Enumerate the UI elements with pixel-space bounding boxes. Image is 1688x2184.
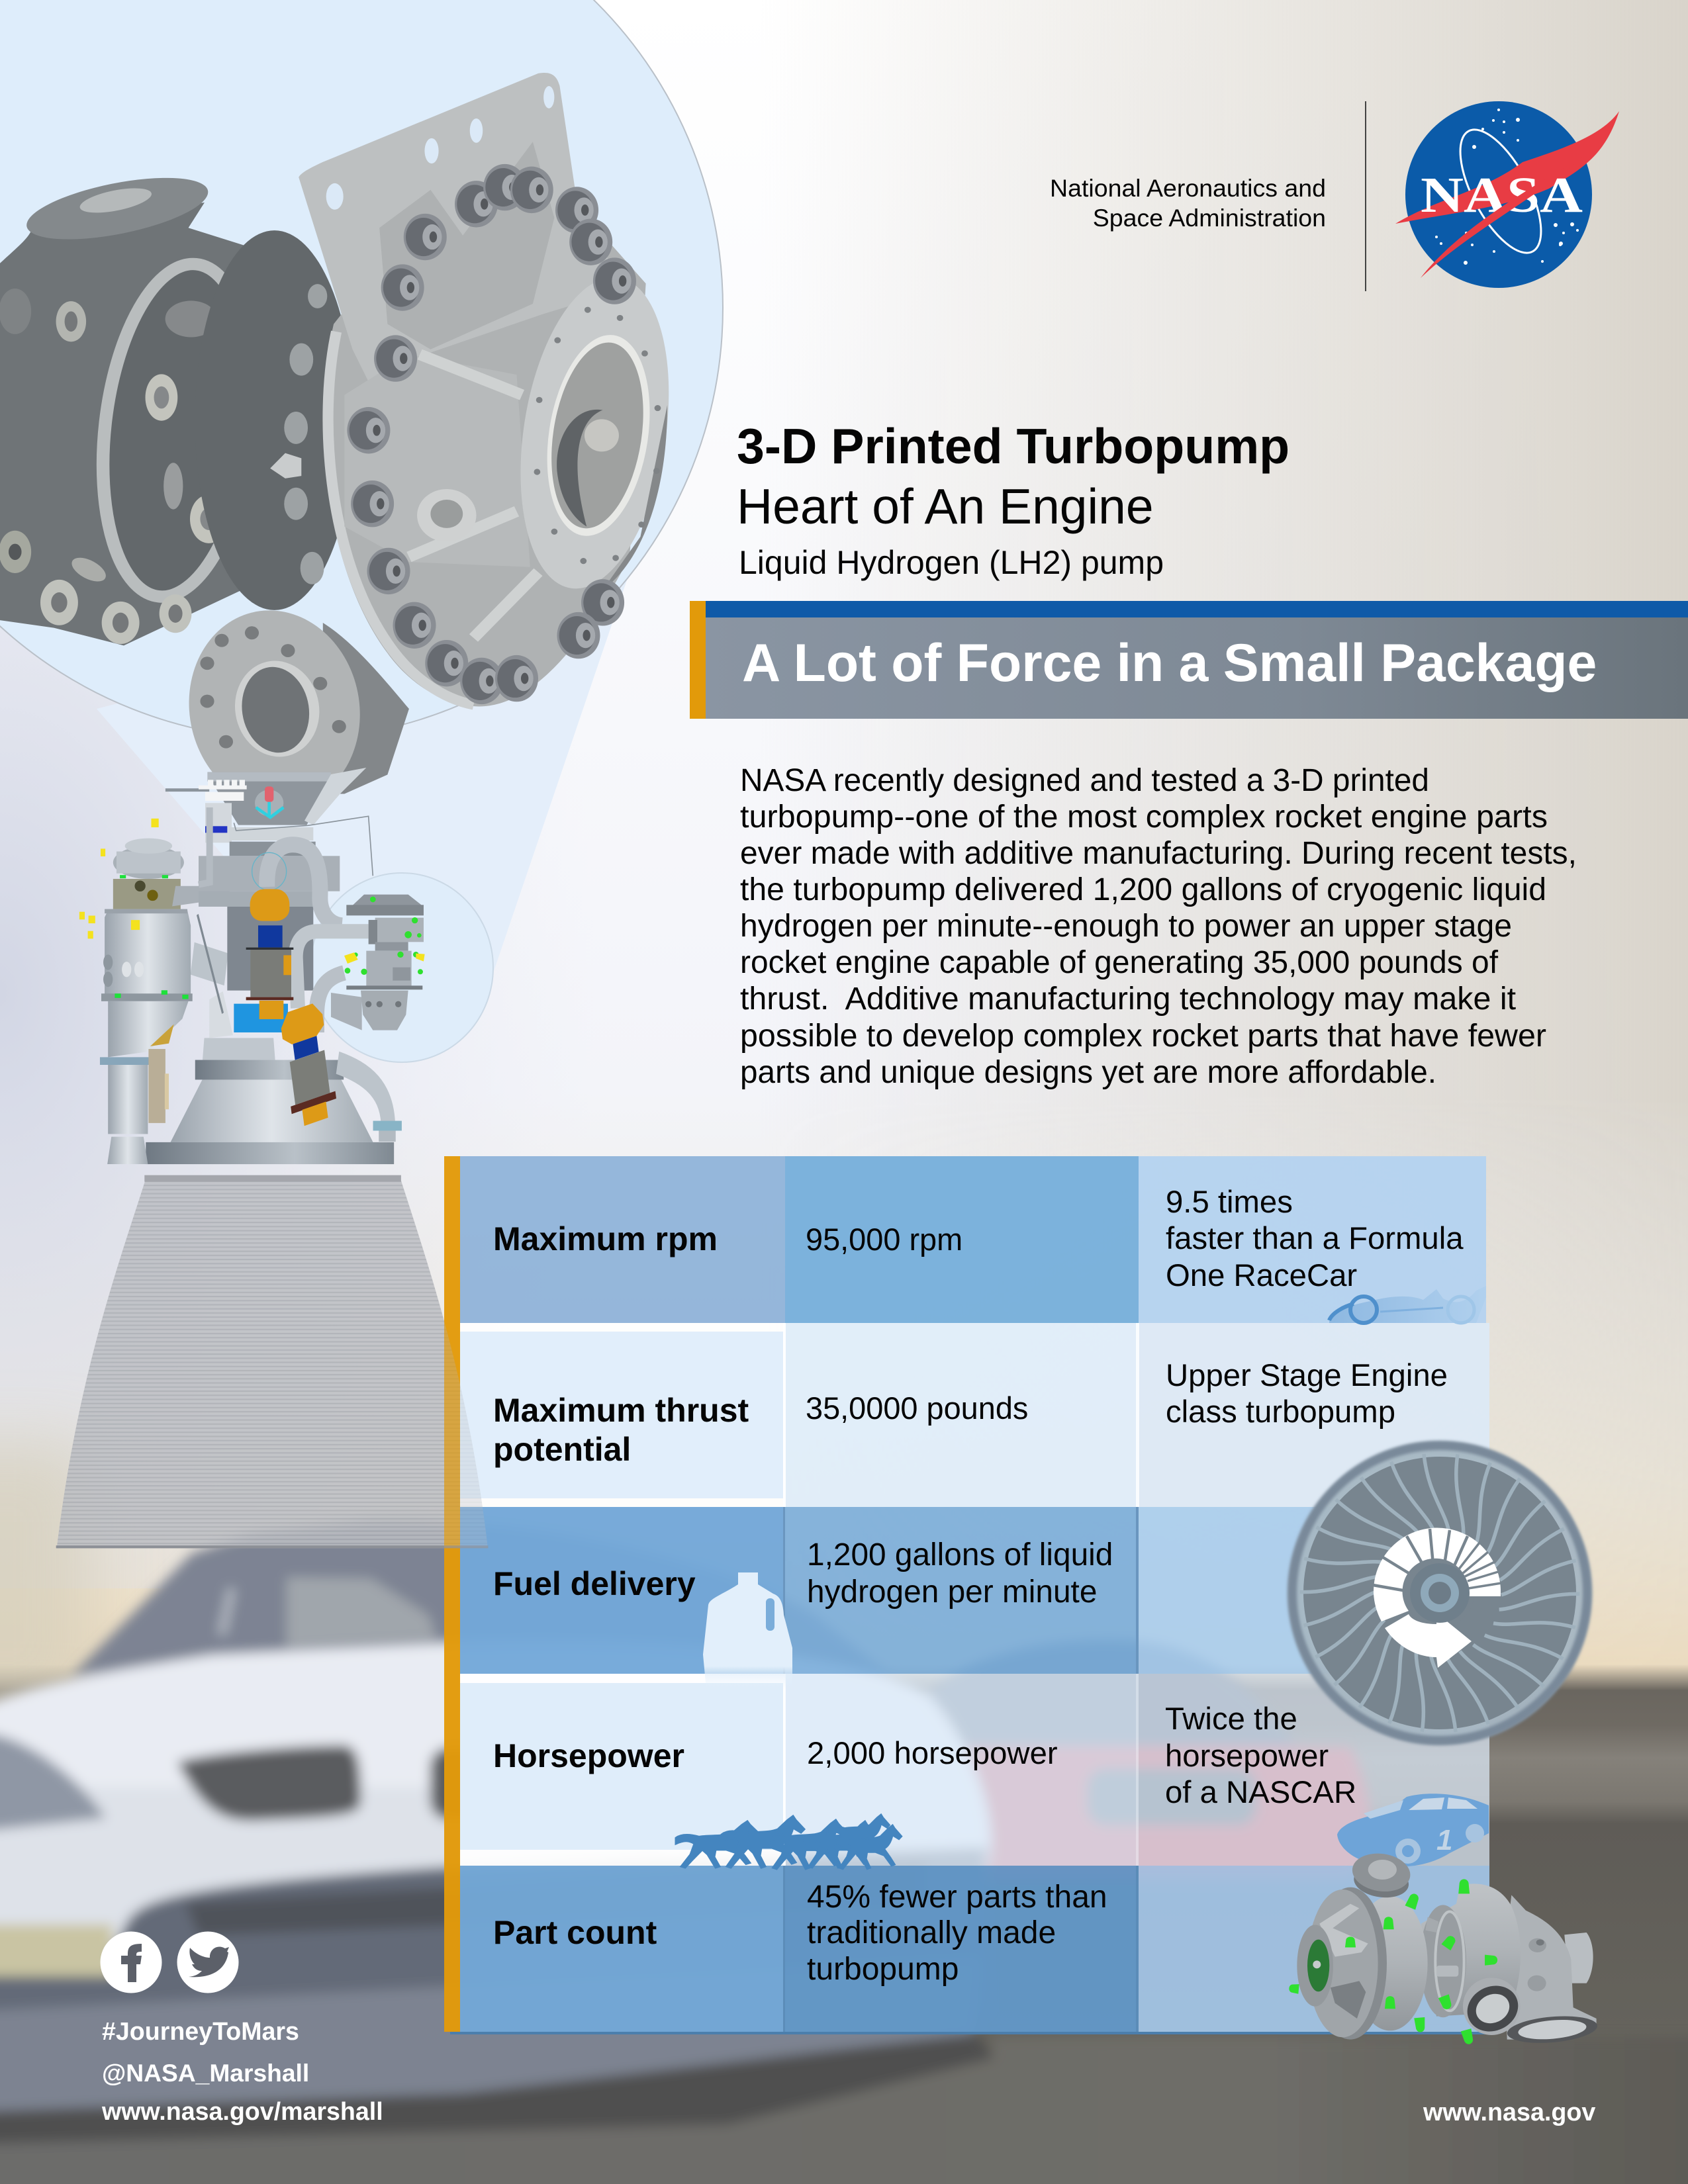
- banner: [690, 601, 1688, 719]
- row labels: Maximum rpm: [493, 1220, 718, 1257]
- small circle: engine detail callout: [310, 873, 493, 1062]
- pump: green fittings: [1289, 1879, 1497, 2046]
- intro paragraph: NASA recently designed and tested a 3-D printed: [740, 763, 1429, 798]
- row comparisons: class turbopump: [1166, 1394, 1395, 1430]
- turbine wheel with rotation arrow: [1289, 1442, 1591, 1744]
- row values: [806, 1222, 1113, 1987]
- turbopump 3D model: [1289, 1850, 1599, 2046]
- title block: Liquid Hydrogen (LH2) pump: [739, 544, 1164, 581]
- NASA logo: [1395, 101, 1619, 288]
- row labels: potential: [493, 1431, 631, 1468]
- table cells: [450, 1156, 1489, 2034]
- icon: twitter: [177, 1931, 238, 1993]
- row comparisons: [1165, 1185, 1464, 1810]
- icon: running horses: [676, 1815, 902, 1869]
- footer handles: #JourneyToMars: [102, 2017, 299, 2045]
- row labels: [493, 1220, 749, 1951]
- row values: 2,000 horsepower: [807, 1736, 1058, 1771]
- data table: [444, 1156, 1489, 2034]
- icon: facebook: [101, 1931, 162, 1993]
- table orange rail: [444, 1156, 460, 2032]
- turbine rotation arrow: [1373, 1527, 1501, 1668]
- NASA logo: NASA: [1421, 167, 1583, 223]
- footer handles: www.nasa.gov/marshall: [101, 2097, 383, 2125]
- intro paragraph: thrust. Additive manufacturing technology may make it: [740, 981, 1516, 1017]
- footer website: www.nasa.gov: [1423, 2098, 1595, 2126]
- banner: A Lot of Force in a Small Package: [742, 633, 1597, 693]
- organization name: National Aeronautics and: [1050, 174, 1326, 202]
- cone: zoom connector from engine to detail: [97, 572, 630, 973]
- row values: 45% fewer parts than: [807, 1880, 1107, 1915]
- nozzle overlap shading on table: [444, 1321, 489, 1549]
- pump: right barrel: [1420, 1884, 1521, 2017]
- pump: left bowl and face: [1297, 1850, 1428, 2040]
- title block: 3-D Printed Turbopump: [737, 418, 1289, 474]
- background photo: blurred race cars: [0, 1520, 1688, 2184]
- icon: milk jug: [703, 1572, 792, 1690]
- engine: yellow and green markers: [79, 819, 189, 999]
- circle: enlarged turbopump backdrop: [0, 0, 723, 739]
- pump: side flange: [1460, 1978, 1526, 2040]
- row labels: Part count: [493, 1914, 657, 1951]
- row values: hydrogen per minute: [807, 1574, 1097, 1610]
- row comparisons: Upper Stage Engine: [1166, 1358, 1448, 1393]
- row values: 35,0000 pounds: [806, 1391, 1028, 1426]
- intro paragraph: possible to develop complex rocket parts that have fewer: [740, 1019, 1546, 1054]
- engine: lower pump unit: [279, 1000, 338, 1130]
- nozzle: striped engine bell: [56, 1175, 488, 1548]
- intro paragraph: rocket engine capable of generating 35,000 pounds of: [740, 945, 1499, 980]
- row comparisons: faster than a Formula: [1166, 1221, 1464, 1256]
- engine: central chamber, feed pipes and pump: [199, 768, 425, 1032]
- row labels: Maximum thrust: [493, 1392, 749, 1429]
- row values: 95,000 rpm: [806, 1222, 962, 1257]
- icon: NASCAR stock car: [1337, 1794, 1489, 1867]
- intro paragraph: [740, 763, 1577, 1090]
- organization name: Space Administration: [1093, 204, 1326, 232]
- footer handles: @NASA_Marshall: [102, 2059, 309, 2087]
- row comparisons: 9.5 times: [1166, 1185, 1293, 1220]
- row labels: Horsepower: [493, 1737, 684, 1774]
- row values: turbopump: [807, 1952, 959, 1987]
- engine: left tank and base: [100, 790, 402, 1164]
- row comparisons: of a NASCAR: [1165, 1775, 1356, 1810]
- footer handles: [101, 2017, 383, 2125]
- icon: formula one car: [1329, 1286, 1486, 1323]
- pump: elbow outlet: [1505, 1895, 1599, 2046]
- intro paragraph: turbopump--one of the most complex rocket engine parts: [740, 799, 1548, 835]
- social icons: [101, 1931, 238, 1993]
- title block: [737, 418, 1289, 581]
- intro paragraph: ever made with additive manufacturing. During recent tests,: [740, 836, 1577, 871]
- turbine blades: [1300, 1454, 1579, 1732]
- organization name: [1050, 174, 1326, 232]
- title block: Heart of An Engine: [737, 478, 1154, 534]
- engine illustration: [79, 768, 425, 1164]
- row comparisons: One RaceCar: [1166, 1258, 1357, 1293]
- intro paragraph: the turbopump delivered 1,200 gallons of cryogenic liquid: [740, 872, 1546, 907]
- intro paragraph: hydrogen per minute--enough to power an upper stage: [740, 909, 1512, 944]
- engine: right gas generator: [316, 895, 425, 1032]
- icon: NASCAR stock car: 1: [1436, 1824, 1452, 1856]
- intro paragraph: parts and unique designs yet are more affordable.: [740, 1055, 1436, 1090]
- photo illustration: turbopump close-up: [0, 73, 688, 818]
- row values: traditionally made: [807, 1915, 1056, 1950]
- row comparisons: horsepower: [1165, 1739, 1329, 1774]
- row labels: Fuel delivery: [493, 1565, 696, 1602]
- row values: 1,200 gallons of liquid: [807, 1537, 1113, 1572]
- row comparisons: Twice the: [1165, 1702, 1297, 1737]
